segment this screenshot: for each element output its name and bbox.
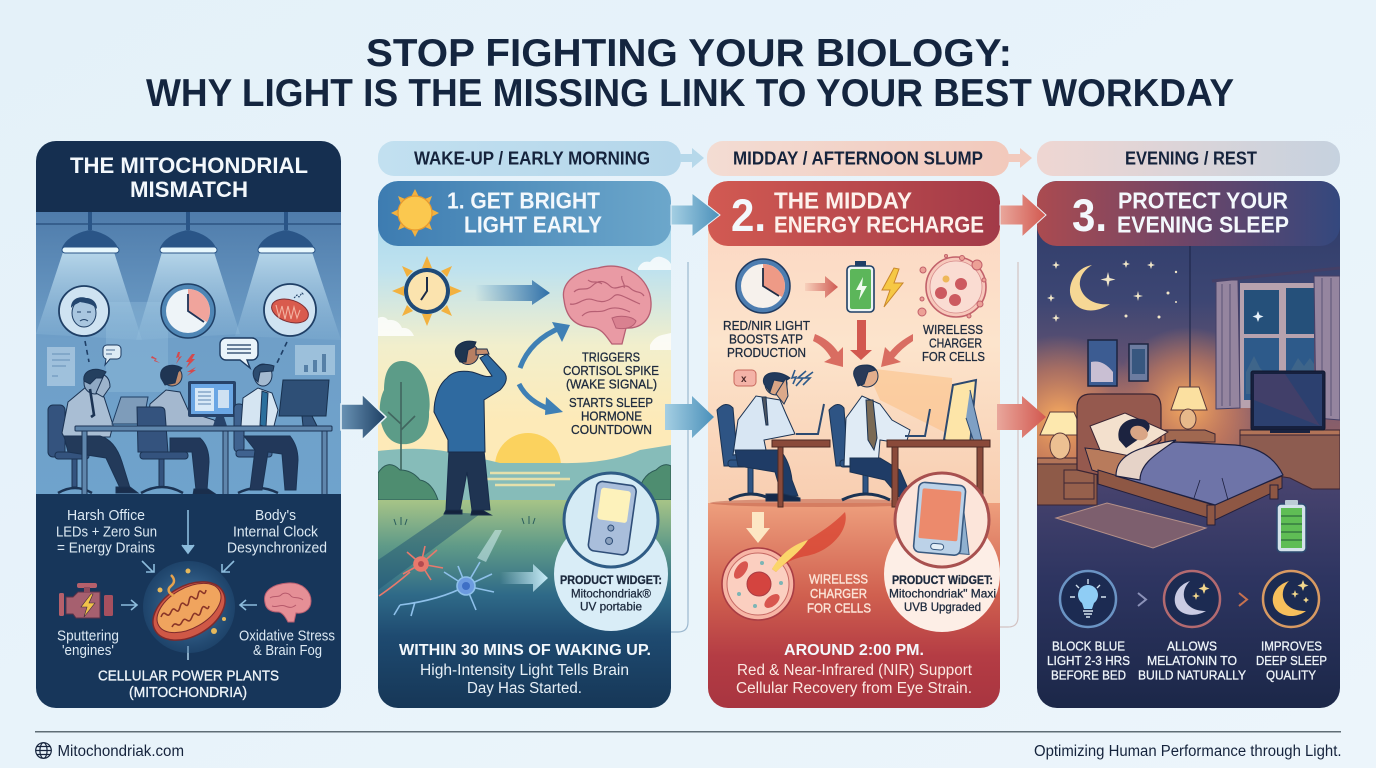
curtains	[1212, 268, 1340, 420]
lamp left	[1040, 412, 1084, 459]
floor	[708, 503, 1000, 708]
clouds	[378, 257, 671, 350]
arrow: panel 3 to panel 4	[997, 396, 1046, 438]
light flame to cell	[772, 512, 846, 572]
header band	[36, 141, 341, 212]
labels: Internal Clock	[233, 524, 319, 540]
blanket	[1116, 440, 1283, 505]
footer: website: Mitochondriak.com	[58, 743, 184, 760]
arrows to worker	[813, 320, 913, 367]
panel: the mitochondrial mismatch	[36, 141, 341, 708]
step captions: ALLOWS	[1167, 638, 1217, 654]
footer rule	[35, 731, 1341, 732]
diagram: cellular power plants	[56, 508, 335, 701]
stress bolts	[151, 352, 196, 376]
desk 1	[772, 440, 830, 507]
brain captions	[563, 350, 659, 437]
product widget: Mitochondriak UV portable: PRODUCT WIDGET:	[560, 573, 662, 587]
pill: wake-up / early morning: WAKE-UP / EARLY MORNING	[414, 148, 650, 168]
portable device	[588, 481, 637, 556]
panel: protect your evening sleep	[975, 181, 1340, 710]
product widget: Mitochondriak Maxi UVB: Mitochondriak" Maxi	[889, 586, 996, 600]
lamp right	[1165, 387, 1215, 442]
person watching sunrise	[434, 341, 506, 515]
bedroom wall	[1037, 181, 1340, 481]
arrow: panel 1 to panel 2	[341, 394, 386, 440]
panel 3 cell caption: CHARGER	[810, 586, 867, 601]
bed mattress and frame	[1085, 448, 1282, 525]
framed pictures	[1088, 340, 1148, 386]
upright worker	[844, 365, 912, 498]
sun on horizon	[495, 433, 561, 463]
panel 3 cell caption: WIRELESS	[809, 572, 868, 586]
pill: wake-up / early morning	[378, 141, 704, 176]
labels: = Energy Drains	[57, 540, 155, 556]
panel 3 heading: 2.	[731, 190, 766, 241]
header band	[378, 181, 671, 246]
panel 3 right caption: CHARGER	[929, 336, 982, 350]
small speech bubble	[103, 345, 121, 365]
footer: tagline: Optimizing Human Performance through Light.	[1034, 743, 1342, 760]
panel 3 heading: ENERGY RECHARGE	[774, 212, 984, 238]
step captions: BLOCK BLUE	[1052, 638, 1125, 654]
morning sky	[378, 181, 671, 481]
panel 3 right caption: WIRELESS	[923, 322, 983, 337]
tree	[380, 361, 430, 472]
caption: cellular power plants	[98, 668, 279, 701]
labels: Harsh Office	[67, 508, 145, 524]
step captions: BUILD NATURALLY	[1138, 668, 1246, 682]
icon: moon and stars	[1164, 571, 1220, 627]
panel 3 caption: Cellular Recovery from Eye Strain.	[736, 680, 972, 697]
error bubble: x	[741, 374, 747, 385]
title: STOP FIGHTING YOUR BIOLOGY:	[366, 32, 1012, 75]
pill: evening / rest: EVENING / REST	[1125, 148, 1257, 168]
nightstand left	[1037, 458, 1097, 505]
faint wall screen	[106, 302, 168, 392]
panel 2 heading: 1. GET BRIGHT	[447, 188, 600, 214]
right monitor	[279, 380, 329, 426]
icon: afternoon clock	[736, 259, 790, 313]
panel 4 heading	[1072, 188, 1289, 241]
labels: Sputtering	[57, 628, 119, 644]
curved arrow up	[520, 327, 562, 368]
arrow: clock to battery	[805, 276, 838, 298]
sleeping woman	[1118, 419, 1150, 448]
office workers at desk	[48, 364, 332, 495]
worker 3 chair	[234, 404, 278, 493]
worker 3	[241, 364, 298, 490]
brain captions: CORTISOL SPIKE	[563, 363, 659, 378]
panel 3 right caption	[922, 322, 985, 364]
ground	[378, 500, 671, 710]
room wall	[708, 181, 1000, 506]
down arrow to cell	[746, 512, 770, 543]
desk	[75, 426, 332, 495]
arrow: clock to brain	[475, 280, 550, 305]
icon: lightning bolt	[882, 268, 903, 307]
panel 3 heading	[731, 188, 984, 241]
panel 3 left caption: PRODUCTION	[727, 345, 806, 360]
icon: brain	[563, 266, 651, 344]
icon: clock	[161, 284, 215, 338]
light cones	[36, 252, 341, 340]
icon: battery charging	[847, 261, 874, 312]
header band	[708, 181, 1000, 246]
slumped worker	[733, 373, 800, 501]
panel 4 heading: PROTECT YOUR	[1118, 188, 1288, 214]
icon: golden moon	[1263, 571, 1319, 627]
icon: sunrise clock	[392, 256, 462, 326]
caption: cellular power plants: CELLULAR POWER PLANTS	[98, 668, 279, 684]
desktop monitor	[188, 381, 236, 426]
icon: light bulb	[1060, 571, 1116, 627]
neuron: blue	[394, 562, 494, 616]
panel 1 heading	[70, 153, 308, 202]
window	[1240, 283, 1314, 408]
step captions	[1047, 638, 1327, 682]
brain captions: COUNTDOWN	[571, 422, 652, 437]
worker 1 chair	[48, 405, 92, 493]
mountains	[378, 445, 671, 500]
title	[146, 32, 1234, 115]
product widget: Mitochondriak UV portable: UV portabie	[580, 600, 642, 614]
product widget: Mitochondriak Maxi UVB: PRODUCT WiDGET:	[892, 573, 993, 587]
icon: mitochondrion	[264, 284, 316, 336]
worker 2 chair	[137, 407, 188, 493]
step captions: QUALITY	[1266, 668, 1316, 682]
labels: Desynchronized	[227, 540, 327, 556]
panel 1 heading: MISMATCH	[130, 177, 248, 202]
icon: engine	[59, 583, 113, 618]
grass tufts	[394, 516, 535, 525]
pill: midday / afternoon slump	[707, 141, 1032, 176]
labels: Oxidative Stress	[239, 628, 335, 644]
icon: cell with organelles	[918, 254, 986, 318]
large speech bubble	[220, 338, 258, 368]
chair 2	[829, 404, 890, 500]
labels	[56, 508, 335, 659]
light therapy monitor	[944, 380, 983, 445]
panel 3 cell caption: FOR CELLS	[807, 600, 871, 616]
panel 4 heading: EVENING SLEEP	[1117, 212, 1289, 238]
labels: LEDs + Zero Sun	[56, 524, 157, 540]
bushes	[378, 465, 438, 500]
product widget: Mitochondriak Maxi UVB	[884, 473, 1000, 632]
panel 2 heading: LIGHT EARLY	[464, 212, 602, 238]
labels: & Brain Fog	[253, 643, 322, 659]
panel 3 caption: AROUND 2:00 PM.	[784, 642, 924, 659]
panel 3 left caption: RED/NIR LIGHT	[723, 318, 810, 333]
mitochondrion with halo	[143, 561, 235, 653]
step captions: BEFORE BED	[1051, 668, 1126, 682]
step captions: LIGHT 2-3 HRS	[1047, 653, 1130, 668]
lamp glow right	[1110, 327, 1266, 483]
step captions: IMPROVES	[1261, 638, 1322, 654]
labels: 'engines'	[62, 643, 114, 659]
monitor light beam	[866, 368, 952, 436]
brain captions: TRIGGERS	[582, 350, 640, 364]
curved arrowhead down	[545, 397, 563, 415]
panel 4 heading: 3.	[1072, 190, 1107, 241]
wall document	[47, 347, 75, 386]
panel 2 caption	[399, 642, 651, 697]
icon: crescent moon	[1070, 265, 1110, 310]
office scene background	[36, 212, 341, 495]
curved arrowhead up	[552, 322, 570, 342]
flow arrows	[121, 510, 257, 660]
stress marks	[792, 370, 813, 386]
bed headboard	[1077, 394, 1161, 480]
worker 2	[147, 365, 218, 495]
icon: full battery	[1277, 500, 1306, 552]
water ripples	[485, 473, 570, 485]
panel 2 heading	[447, 188, 602, 238]
icon: tired face	[59, 286, 109, 336]
stars	[1047, 260, 1177, 322]
header band	[1037, 181, 1340, 246]
labels: Body's	[255, 508, 296, 524]
panel: the midday energy recharge	[708, 181, 1000, 708]
ceiling lamps	[62, 212, 315, 253]
rug	[1056, 503, 1206, 548]
product widget: Mitochondriak UV portable	[554, 473, 668, 631]
arrow to widget	[500, 564, 548, 592]
light beam	[477, 530, 502, 562]
wall corner	[1189, 246, 1191, 390]
caption: cellular power plants: (MITOCHONDRIA)	[129, 685, 247, 701]
arrow: panel 2 to panel 3	[665, 396, 714, 438]
brain captions: STARTS SLEEP	[569, 395, 653, 410]
worker 1 laptop	[112, 397, 148, 424]
ceiling band	[36, 223, 341, 225]
wall chart	[295, 345, 335, 375]
chair 1	[717, 404, 773, 500]
panel: get bright light early	[378, 181, 671, 710]
chevron	[1138, 593, 1146, 606]
floor	[1037, 470, 1340, 710]
icon: cell receiving light	[722, 548, 794, 620]
product widget: Mitochondriak Maxi UVB: UVB Upgraded	[904, 600, 981, 614]
dresser	[1240, 430, 1340, 489]
panel 3 cell caption	[807, 572, 871, 616]
pillow	[1090, 413, 1168, 456]
panel 3 right caption: FOR CELLS	[922, 349, 985, 364]
brain captions: (WAKE SIGNAL)	[566, 376, 657, 392]
panel 3 left caption	[723, 318, 810, 360]
lower info band	[36, 494, 341, 708]
pill: evening / rest	[1037, 141, 1340, 176]
chevron	[1239, 593, 1247, 606]
product widget: Mitochondriak UV portable: Mitochondriak®	[571, 586, 651, 600]
thought dashes	[85, 341, 287, 363]
connector outlines behind panels	[670, 262, 1018, 632]
panel 1 heading: THE MITOCHONDRIAL	[70, 153, 308, 178]
step captions: DEEP SLEEP	[1256, 653, 1327, 668]
light panel device	[913, 482, 975, 556]
icon: header sun	[391, 189, 439, 237]
panel 3 caption	[736, 642, 973, 697]
icon: brain	[265, 583, 311, 622]
worker 1	[62, 369, 138, 493]
neuron: red	[379, 546, 443, 596]
panel 3 left caption: BOOSTS ATP	[729, 332, 803, 346]
error bubble	[734, 370, 756, 386]
arrow: panel 3 header to panel 4	[1000, 193, 1046, 237]
panel 3 caption: Red & Near-Infrared (NIR) Support	[737, 662, 973, 679]
brain captions: HORMONE	[581, 408, 642, 424]
pill: midday / afternoon slump: MIDDAY / AFTERNOON SLUMP	[733, 148, 983, 168]
arrow: panel 2 header to panel 3	[671, 193, 720, 237]
desk 2	[887, 440, 990, 507]
panel 2 caption: High-Intensity Light Tells Brain	[420, 662, 629, 679]
panel 3 heading: THE MIDDAY	[774, 188, 912, 214]
lamp glow left	[975, 335, 1145, 505]
step captions: MELATONIN TO	[1147, 653, 1237, 668]
curved arrow down	[519, 384, 552, 410]
laptop left	[796, 404, 824, 434]
panel 2 caption: Day Has Started.	[467, 680, 582, 697]
panel 2 caption: WITHIN 30 MINS OF WAKING UP.	[399, 642, 651, 659]
tv	[1251, 371, 1325, 433]
title: WHY LIGHT IS THE MISSING LINK TO YOUR BEST WORKDAY	[146, 72, 1234, 115]
shadows	[378, 512, 480, 590]
laptop right	[905, 409, 930, 436]
